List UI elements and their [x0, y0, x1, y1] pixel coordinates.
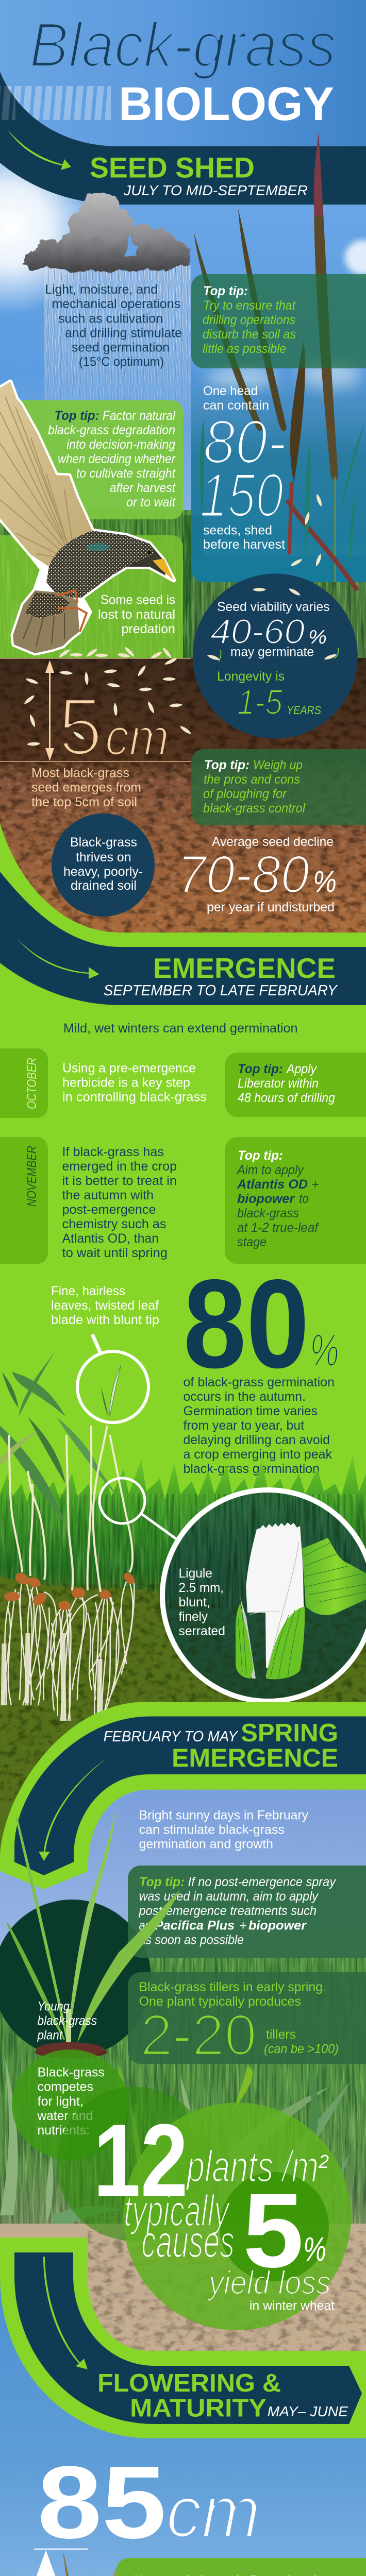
panel: tillers: tillers: [266, 2027, 296, 2042]
panel: heavy soil: thrives on: [76, 850, 131, 865]
panel: top tip, Atlantis: at 1-2 true-leaf: [237, 1221, 320, 1235]
section band: seed shed: [0, 72, 366, 205]
text: autumn treatment: chemistry such as: [62, 1217, 166, 1231]
panel: flower head: [117, 2558, 366, 2576]
panel: top tip, post-emergence: Top tip:: [139, 1875, 185, 1889]
panel: top tip, Atlantis: Top tip:: [238, 1148, 283, 1163]
panel: viability and longevity: [193, 574, 358, 739]
panel: top tip, Atlantis: black-grass: [237, 1206, 299, 1221]
stat: seed decline: Average seed decline: [212, 835, 334, 849]
text: leaf description: [51, 1284, 159, 1327]
panel: top tip, degradation: black-grass degradation: [48, 423, 175, 437]
panel: tillers: [128, 1972, 366, 2067]
panel: october: [0, 1048, 48, 1118]
text: germination conditions: mechanical operations: [52, 297, 180, 311]
image: flowering grass heads: [41, 2550, 129, 2576]
stat: 12 plants per square metre causes 5 percent yield loss: yield loss: [207, 2264, 331, 2301]
panel: top tip, drilling: Top tip:: [203, 284, 248, 298]
text: autumn treatment: to wait until spring: [62, 1246, 168, 1260]
panel: top tip, degradation: [21, 400, 183, 519]
heading: flowering and maturity: FLOWERING &: [97, 2369, 281, 2397]
panel: heavy soil: Black-grass: [70, 835, 137, 850]
panel: seeds per head: before harvest: [203, 537, 285, 552]
stat: 12 plants per square metre causes 5 percent yield loss: 5: [243, 2172, 304, 2290]
panel: competition: [12, 2049, 128, 2160]
panel: top tip, post-emergence: was used in autumn, aim to apply: [139, 1889, 319, 1904]
panel: viability and longevity: YEARS: [287, 704, 321, 717]
image: wheat seedlings with roots: [0, 1349, 137, 1721]
text: autumn treatment: post-emergence: [62, 1202, 156, 1217]
panel: tillers: (can be >100): [264, 2042, 339, 2056]
arrow: into emergence: [17, 939, 99, 979]
text: leaf description: Fine, hairless: [51, 1284, 125, 1298]
seeds in soil: [23, 657, 192, 746]
stat: 85 cm: 85: [37, 2445, 166, 2560]
panel: predation: Some seed is: [101, 593, 175, 607]
panel: top tip, ploughing: Weigh up: [253, 758, 303, 772]
heading: spring emergence: SPRING: [241, 1719, 338, 1747]
panel: heavy soil: drained soil: [71, 878, 137, 893]
panel: competition: Black-grass: [37, 2065, 105, 2080]
stat: 85 cm: cm: [166, 2471, 260, 2553]
stat: 5 cm: Most black-grass: [31, 766, 129, 781]
text: young plant caption: black-grass: [37, 2014, 97, 2028]
text: leaf description: blade with blunt tip: [51, 1313, 159, 1327]
callout: ligule locator: [99, 1478, 178, 1540]
panel: top tip, post-emergence: biopower: [248, 1919, 307, 1933]
arrow: 5 cm depth: [0, 658, 191, 761]
text: germination timing: [184, 1375, 335, 1476]
text: pre-emergence: in controlling black-grass: [62, 1090, 207, 1105]
stat: seed decline: %: [313, 865, 337, 899]
panel: top tip, ploughing: of ploughing for: [203, 787, 288, 801]
panel: top tip, Atlantis: to: [299, 1192, 309, 1206]
panel: competition: water and: [37, 2109, 93, 2123]
panel: top tip, degradation: to cultivate straight: [76, 466, 176, 481]
panel: top tip, drilling: disturb the soil as: [203, 327, 296, 342]
text: autumn treatment: If black-grass has: [62, 1145, 164, 1159]
background: sky above flowering section: [0, 2238, 366, 2576]
panel: top tip, post-emergence: post-emergence treatments such: [139, 1904, 317, 1918]
background: spring sky: [0, 1789, 366, 1973]
section band: spring emergence navy: [14, 1717, 366, 1875]
background: grass and olive soil: [0, 1455, 366, 1861]
text: autumn treatment: emerged in the crop: [62, 1159, 177, 1174]
panel: top tip, Atlantis: [225, 1137, 366, 1264]
background: green emergence field: [0, 823, 366, 1546]
panel: top tip, Atlantis: biopower: [237, 1192, 295, 1206]
panel: seeds per head: 80-: [203, 408, 287, 477]
panel: top tip, degradation: Top tip:: [55, 409, 99, 423]
arrow: spring direction: [39, 1758, 107, 1861]
stat: 12 plants per square metre causes 5 percent yield loss: 2: [318, 2151, 329, 2172]
panel: viability and longevity: may germinate: [230, 645, 314, 659]
panel: top tip, Liberator: [225, 1053, 366, 1117]
text: germination timing: Germination time varies: [184, 1404, 318, 1418]
panel: october: OCTOBER: [25, 1058, 39, 1109]
text: young plant caption: plant: [37, 2028, 63, 2043]
text: germination conditions: [45, 282, 182, 369]
stat: 80 percent: 80: [184, 1253, 309, 1394]
text: germination conditions: (15°C optimum): [79, 355, 164, 369]
text: bright sunny days: Bright sunny days in February: [139, 1808, 308, 1823]
grass strip behind bird: [0, 510, 204, 659]
panel: predation: [0, 535, 183, 658]
heading: flowering and maturity: MAY– JUNE: [268, 2403, 348, 2419]
heading: emergence: EMERGENCE: [153, 952, 336, 984]
panel: top tip, Liberator: Apply: [286, 1062, 317, 1076]
callout: ligule close-up: [162, 1490, 366, 1703]
stat: seed decline: [177, 835, 337, 914]
panel: top tip, drilling: [191, 274, 366, 368]
panel: top tip, Liberator: Liberator within: [238, 1076, 319, 1091]
heading: spring emergence: EMERGENCE: [172, 1743, 338, 1772]
image: starling: [0, 382, 174, 653]
panel: tillers: One plant typically produces: [139, 1994, 301, 2009]
heading: spring emergence: FEBRUARY TO MAY: [104, 1728, 239, 1745]
panel: top tip, post-emergence: Pacifica Plus: [155, 1919, 235, 1933]
stat circles: yield loss: [57, 2087, 351, 2330]
panel: predation: lost to natural: [98, 607, 175, 622]
text: young plant caption: Young: [37, 1999, 70, 2014]
arrow: into seed shed: [7, 129, 71, 170]
text: germination conditions: and drilling stimulate: [65, 326, 182, 340]
heading: emergence: [104, 952, 338, 999]
heading: flowering and maturity: MATURITY: [130, 2394, 267, 2422]
decorative stripes: [0, 86, 111, 120]
panel: viability and longevity: Longevity is: [217, 669, 285, 684]
panel: top tip, drilling: little as possible: [203, 342, 286, 356]
panel: viability and longevity: %: [308, 626, 327, 648]
callout: leaf tip magnifier: [77, 1334, 148, 1422]
heading: seed shed: SEED SHED: [90, 151, 255, 183]
stat: 12 plants per square metre causes 5 percent yield loss: %: [303, 2230, 326, 2268]
text: pre-emergence: [62, 1061, 207, 1105]
panel: top tip, Atlantis: Aim to apply: [236, 1163, 304, 1177]
panel: top tip, post-emergence: as: [139, 1919, 151, 1933]
seeds falling in sky panel: [290, 494, 323, 567]
panel: top tip, ploughing: [191, 749, 366, 825]
panel: heavy soil: heavy, poorly-: [63, 865, 143, 879]
stat: 5 cm: seed emerges from: [31, 781, 141, 795]
grass on the right behind teal panel: [191, 556, 366, 659]
panel: top tip, post-emergence: [128, 1866, 366, 1958]
text: germination conditions: Light, moisture, and: [45, 282, 158, 297]
text: autumn treatment: [62, 1145, 177, 1260]
panel: seeds per head: 150: [199, 461, 284, 530]
panel: top tip, Atlantis: Atlantis OD: [237, 1177, 308, 1192]
panel: tillers: Black-grass tillers in early spring.: [139, 1980, 326, 1994]
text: bright sunny days: [139, 1808, 308, 1852]
heading: emergence: SEPTEMBER TO LATE FEBRUARY: [104, 982, 338, 999]
panel: top tip, Atlantis: stage: [237, 1235, 267, 1249]
text: leaf description: leaves, twisted leaf: [51, 1298, 159, 1313]
grass heads in the sky: [194, 133, 365, 590]
stat: 12 plants per square metre causes 5 percent yield loss: 12: [93, 2103, 188, 2218]
stat: seed decline: 70-80: [177, 844, 309, 904]
text: young plant caption: [37, 1999, 97, 2043]
text: germination timing: of black-grass germination: [184, 1375, 335, 1389]
callout: ligule close-up: blunt,: [178, 1595, 210, 1609]
heading: seed shed: [90, 151, 308, 198]
text: pre-emergence: herbicide is a key step: [62, 1076, 190, 1090]
panel: top tip, ploughing: the pros and cons: [204, 772, 300, 787]
text: germination timing: from year to year, but: [184, 1418, 304, 1433]
text: germination timing: occurs in the autumn.: [184, 1389, 306, 1404]
panel: top tip, degradation: or to wait: [126, 495, 176, 510]
text: germination timing: a crop emerging into peak: [184, 1447, 332, 1462]
panel: predation: predation: [122, 622, 175, 636]
text: mild winters: Mild, wet winters can extend germination: [63, 1021, 298, 1036]
heading: flowering and maturity: [97, 2369, 348, 2422]
panel: top tip, Liberator: 48 hours of drilling: [238, 1091, 335, 1105]
icon: storm cloud: [23, 192, 190, 272]
arrow: flowering direction: [43, 2257, 88, 2369]
stat: 12 plants per square metre causes 5 percent yield loss: in winter wheat: [249, 2299, 335, 2313]
panel: seeds per head: [199, 384, 287, 552]
panel: top tip, Atlantis: +: [311, 1177, 319, 1192]
panel: heavy soil: [52, 814, 155, 917]
background: sky with title: [0, 0, 366, 545]
text: autumn treatment: it is better to treat in: [62, 1174, 177, 1188]
stat: 5 cm: [31, 682, 169, 809]
panel: tillers: 2-20: [140, 2003, 257, 2067]
panel: seeds per head: seeds, shed: [203, 523, 272, 538]
stat: 12 plants per square metre causes 5 percent yield loss: causes: [141, 2216, 235, 2267]
panel: viability and longevity: 40-60: [210, 612, 305, 651]
title: Biology: BIOLOGY: [119, 78, 334, 130]
panel: competition: for light,: [37, 2094, 84, 2109]
panel: top tip, ploughing: black-grass control: [203, 801, 306, 816]
text: germination conditions: such as cultivation: [58, 311, 163, 326]
panel: viability and longevity: Seed viability varies: [217, 600, 330, 614]
stat: 12 plants per square metre causes 5 percent yield loss: plants /m: [186, 2142, 319, 2191]
stat: 5 cm: the top 5cm of soil: [31, 795, 137, 809]
panel: top tip, degradation: when deciding whether: [58, 452, 176, 466]
arrow: height scale: [24, 2548, 88, 2576]
text: germination timing: black-grass germination: [184, 1462, 320, 1476]
stat: 80 percent: %: [310, 1325, 339, 1376]
callout: ligule close-up: serrated: [178, 1624, 225, 1638]
stat: seed decline: per year if undisturbed: [207, 900, 335, 914]
stat: 5 cm: cm: [105, 708, 169, 766]
background: wheat field: [0, 1958, 366, 2251]
panel: top tip, degradation: into decision-making: [66, 437, 175, 452]
rain: [44, 265, 191, 425]
section band: flowering outer: [0, 2238, 366, 2438]
section band: emergence: [0, 872, 366, 1005]
panel: competition: competes: [37, 2080, 93, 2094]
text: bright sunny days: can stimulate black-grass: [139, 1823, 285, 1837]
panel: teal fade: [191, 368, 366, 582]
panel: seeds per head: can contain: [203, 398, 269, 413]
panel: top tip, post-emergence: If no post-emergence spray: [188, 1875, 336, 1889]
stat: 12 plants per square metre causes 5 percent yield loss: [93, 2103, 335, 2313]
heading: seed shed: JULY TO MID-SEPTEMBER: [123, 182, 308, 198]
text: autumn treatment: the autumn with: [62, 1188, 154, 1202]
text: germination conditions: seed germination: [72, 341, 170, 355]
title: Black-grass: Black-grass: [29, 10, 336, 80]
callout: ligule close-up: finely: [178, 1609, 208, 1624]
panel: young plant: [0, 1900, 151, 2058]
text: autumn treatment: Atlantis OD, than: [62, 1231, 159, 1246]
panel: top tip, drilling: drilling operations: [203, 313, 295, 327]
panel: november: [0, 1137, 48, 1264]
panel: november: NOVEMBER: [25, 1146, 39, 1207]
section band: flowering navy: [14, 2252, 362, 2424]
stat: 85 cm: [37, 2445, 260, 2560]
text: bright sunny days: germination and growth: [139, 1837, 273, 1852]
panel: top tip, drilling: Try to ensure that: [203, 298, 296, 313]
image: young black-grass plant: [7, 1809, 180, 2057]
panel: top tip, ploughing: Top tip:: [204, 758, 249, 772]
section band: spring emergence outer: [0, 1702, 366, 1889]
stat: 5 cm: 5: [58, 682, 103, 772]
heading: spring emergence: [104, 1719, 338, 1772]
panel: viability and longevity: 1-5: [237, 683, 282, 722]
background: sandy soil: [0, 2224, 366, 2351]
panel: competition: nutrients:: [37, 2123, 90, 2138]
text: pre-emergence: Using a pre-emergence: [62, 1061, 196, 1075]
seeds on the green panel: [58, 646, 173, 660]
decorative stripes over the band: [0, 86, 15, 120]
panel: top tip, post-emergence: +: [239, 1919, 247, 1933]
panel: seeds per head: One head: [203, 384, 258, 398]
callout: ligule close-up: Ligule: [178, 1566, 212, 1581]
callout: ligule close-up: 2.5 mm,: [178, 1581, 224, 1595]
panel: top tip, degradation: Factor natural: [103, 409, 176, 423]
text: germination timing: delaying drilling can avoid: [184, 1433, 330, 1447]
panel: top tip, degradation: after harvest: [110, 481, 176, 495]
stat: 12 plants per square metre causes 5 percent yield loss: typically: [124, 2187, 230, 2235]
panel: top tip, post-emergence: as soon as possible: [139, 1933, 244, 1947]
panel: top tip, Liberator: Top tip:: [238, 1062, 283, 1076]
soil: [0, 658, 366, 933]
